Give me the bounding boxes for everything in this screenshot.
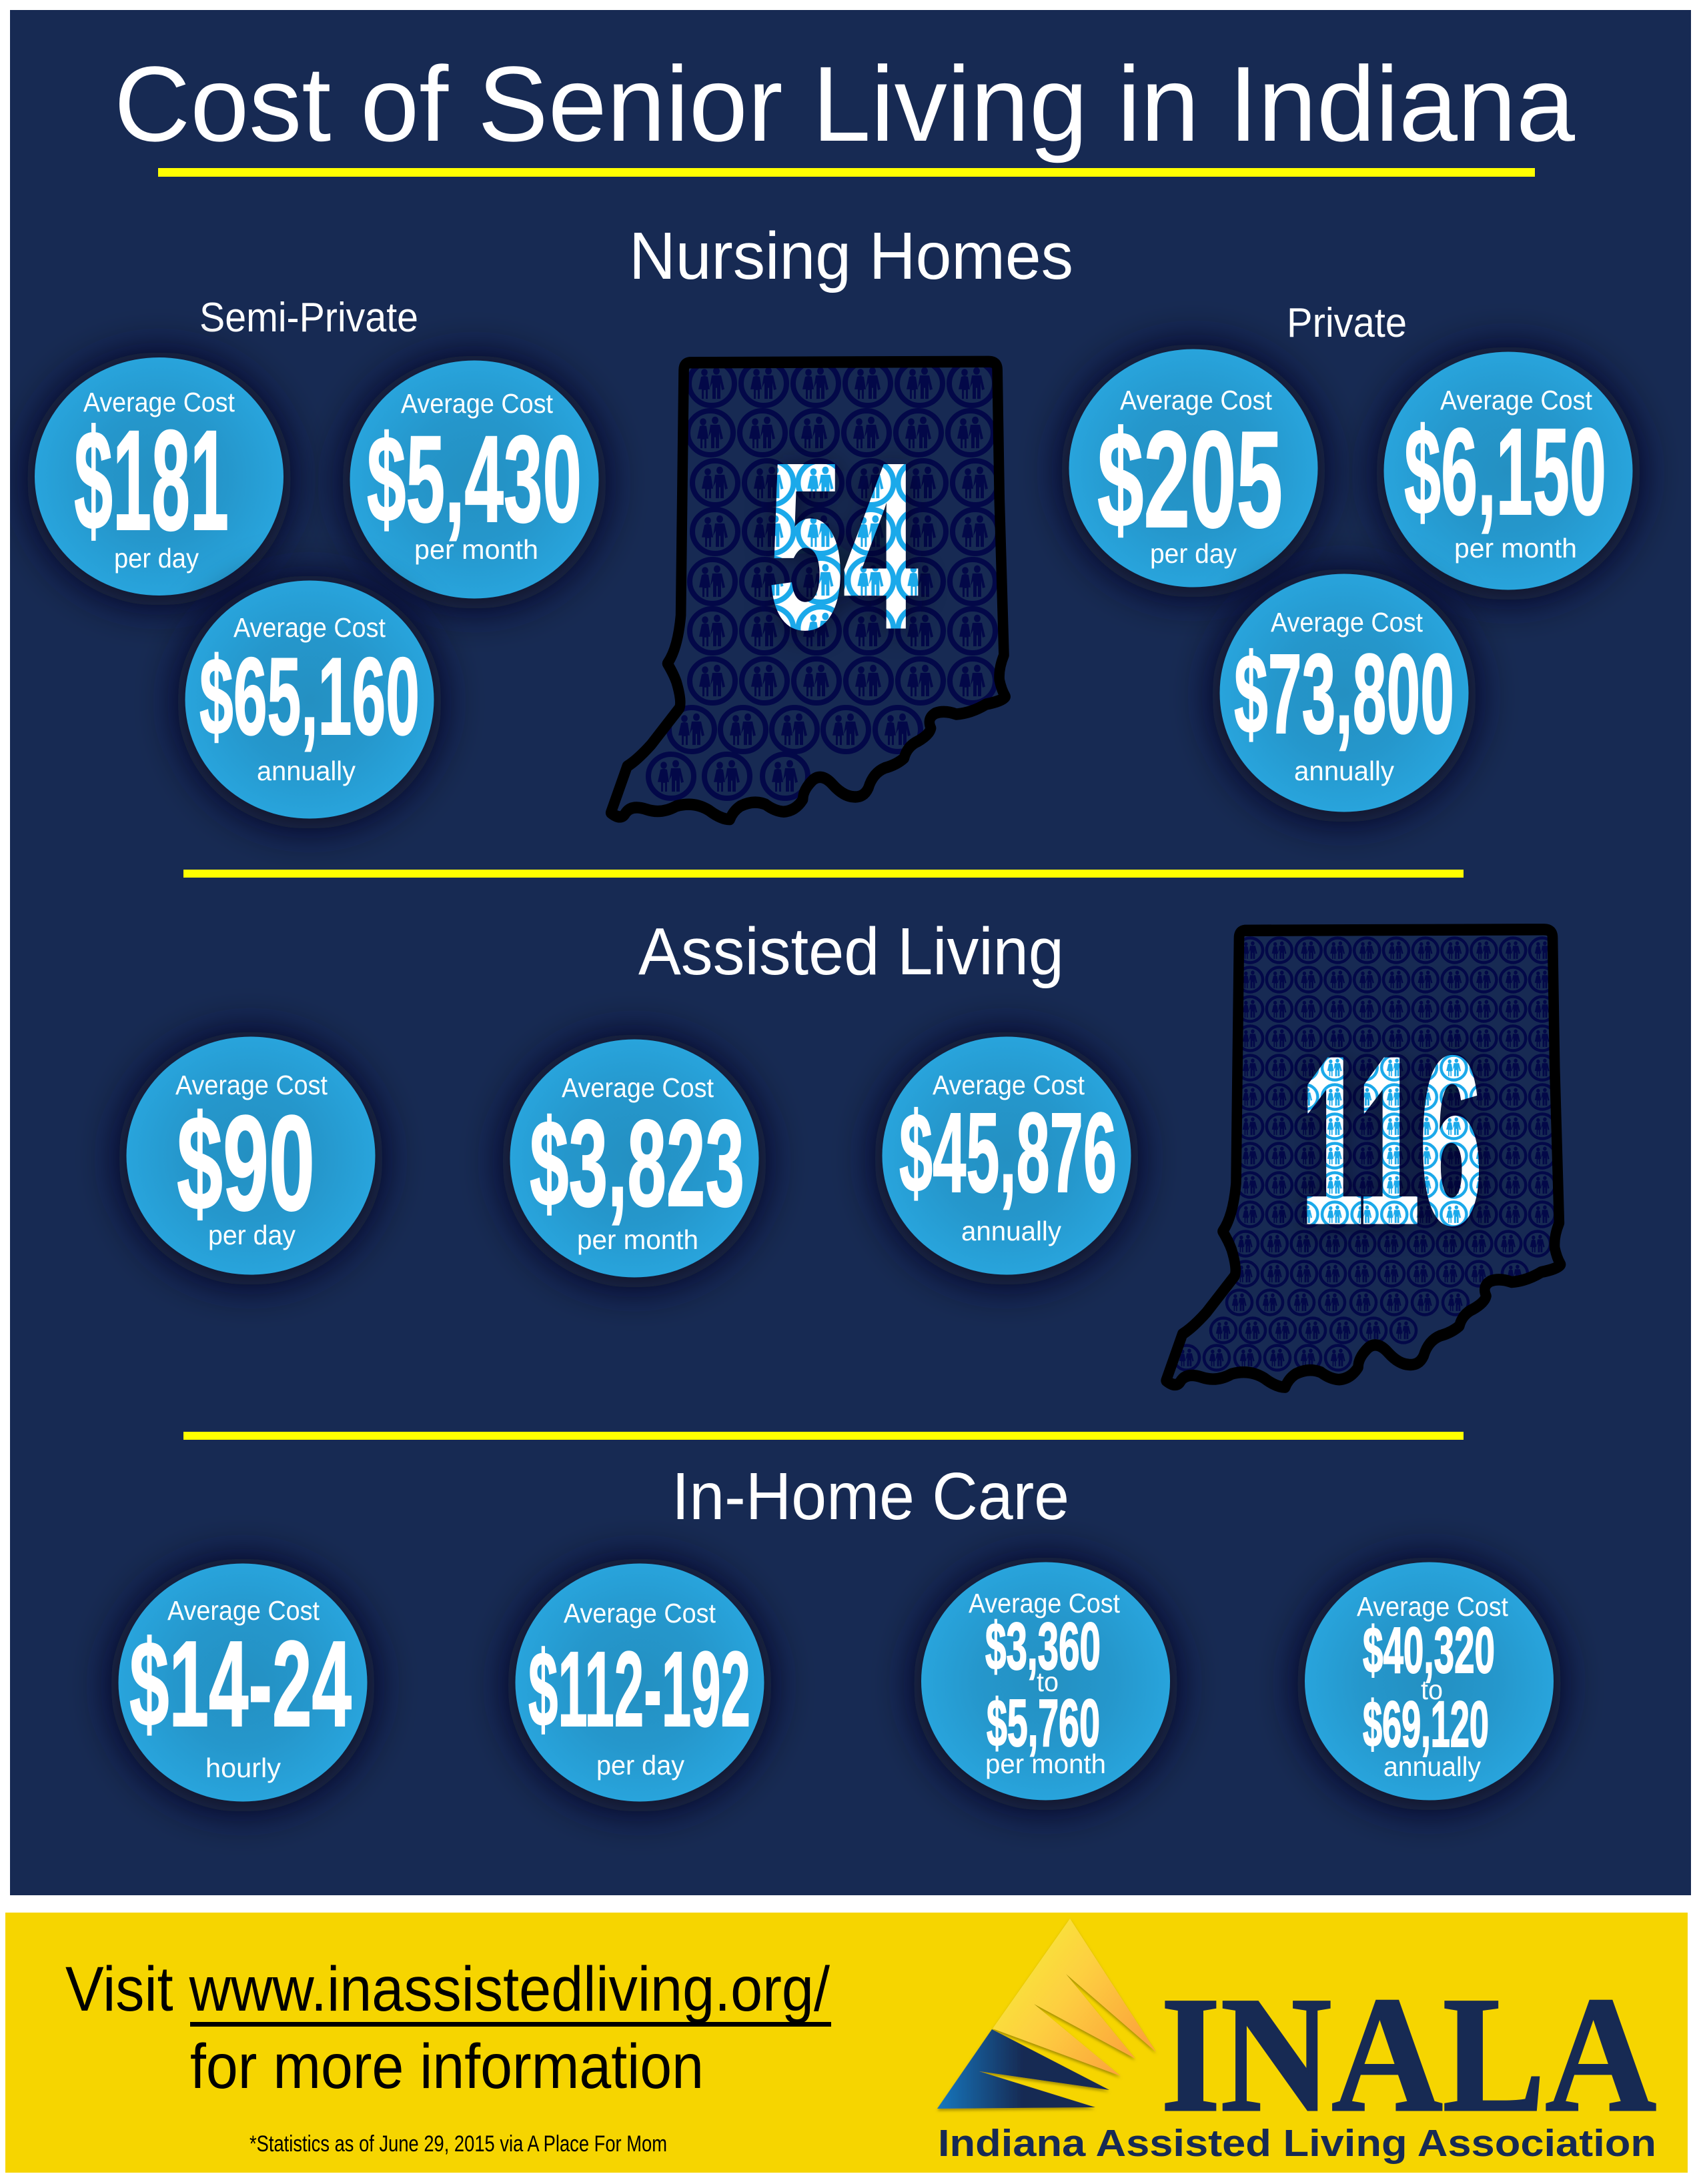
circle: $40,320 to $69,120 annually bbox=[1297, 1557, 1561, 1811]
link underline bbox=[190, 2022, 831, 2027]
circle: $112-192 per day: Average Cost bbox=[564, 1598, 716, 1628]
circle: $181 per day: per day bbox=[114, 543, 199, 574]
circle: $3,823 per month bbox=[502, 1034, 766, 1288]
subheading: Semi-Private: Semi-Private bbox=[199, 295, 418, 341]
circle: $90 per day: $90 bbox=[177, 1088, 315, 1239]
circle: $205 per day: per day bbox=[1150, 538, 1237, 569]
circle: $6,150 per month: Average Cost bbox=[1440, 385, 1593, 415]
circle: $90 per day: per day bbox=[208, 1220, 296, 1250]
state outline bbox=[1166, 930, 1561, 1387]
circle: $205 per day: $205 bbox=[1097, 403, 1283, 556]
number 54: 54 bbox=[768, 415, 919, 677]
circle: $6,150 per month bbox=[1376, 347, 1640, 600]
panel: yellow footer bbox=[5, 1913, 1688, 2173]
number shadow: 54 bbox=[768, 418, 919, 680]
circle: $14-24 hourly: Average Cost bbox=[167, 1595, 320, 1626]
circle: $3,360 to $5,760 per month: $5,760 bbox=[987, 1686, 1100, 1761]
circle: $45,876 annually: annually bbox=[961, 1216, 1061, 1246]
subheading: Private: Private bbox=[1287, 300, 1407, 346]
circle: $40,320 to $69,120 annually: Average Cost bbox=[1357, 1591, 1509, 1622]
circle: $181 per day: Average Cost bbox=[83, 387, 235, 417]
circle: $3,360 to $5,760 per month: $3,360 bbox=[985, 1609, 1101, 1684]
circle: $205 per day bbox=[1061, 344, 1325, 598]
circle: $73,800 annually: annually bbox=[1294, 756, 1394, 786]
circle: $181 per day: $181 bbox=[74, 401, 229, 560]
map: Indiana nursing homes 54 bbox=[611, 361, 1005, 820]
circle: $65,160 annually: $65,160 bbox=[199, 635, 420, 758]
circle: $14-24 hourly: hourly bbox=[205, 1753, 281, 1783]
circle: $45,876 annually: $45,876 bbox=[899, 1090, 1117, 1216]
people pattern bbox=[648, 361, 998, 798]
call to action line 2: for more information bbox=[190, 2031, 704, 2102]
map: Indiana assisted living 116: 116 bbox=[1301, 1011, 1482, 1276]
circle: $3,823 per month: per month bbox=[577, 1224, 698, 1255]
circle: $112-192 per day: $112-192 bbox=[528, 1629, 750, 1749]
circle: $73,800 annually: Average Cost bbox=[1271, 607, 1424, 638]
circle: $3,823 per month: $3,823 bbox=[530, 1095, 744, 1232]
people pattern bbox=[1174, 938, 1555, 1370]
circle: $5,430 per month bbox=[342, 355, 606, 609]
map: Indiana assisted living 116 bbox=[1166, 930, 1561, 1387]
circle: $112-192 per day bbox=[508, 1558, 772, 1812]
circle: $181 per day bbox=[27, 352, 291, 606]
call to action line 1: Visit www.inassistedliving.org/ bbox=[65, 1954, 830, 2025]
circle: $6,150 per month: per month bbox=[1454, 533, 1577, 564]
circle: $112-192 per day: per day bbox=[596, 1750, 684, 1781]
state outline bbox=[611, 361, 1005, 820]
circle: $90 per day bbox=[119, 1032, 383, 1285]
logo: association name: Indiana Assisted Living Association bbox=[938, 2122, 1656, 2165]
circle: $40,320 to $69,120 annually: to bbox=[1421, 1675, 1443, 1705]
circle: $14-24 hourly bbox=[111, 1558, 375, 1812]
circle: $73,800 annually: $73,800 bbox=[1234, 631, 1454, 758]
circle: $3,360 to $5,760 per month: Average Cost bbox=[969, 1588, 1121, 1618]
circle: $5,430 per month: $5,430 bbox=[367, 411, 582, 548]
circle: $45,876 annually: Average Cost bbox=[933, 1070, 1085, 1100]
circle: $205 per day: Average Cost bbox=[1120, 385, 1273, 415]
circle: $3,360 to $5,760 per month bbox=[914, 1557, 1178, 1811]
circle: $5,430 per month: Average Cost bbox=[401, 388, 554, 419]
circle: $3,823 per month: Average Cost bbox=[562, 1072, 714, 1103]
circle: $3,360 to $5,760 per month: per month bbox=[985, 1749, 1106, 1779]
circle: $90 per day: Average Cost bbox=[175, 1070, 328, 1100]
title underline bbox=[158, 168, 1535, 177]
logo: INALA triangle bbox=[937, 1919, 1156, 2109]
circle: $3,360 to $5,760 per month: to bbox=[1037, 1667, 1059, 1697]
heading: Assisted Living: Assisted Living bbox=[638, 914, 1064, 989]
divider bbox=[183, 1432, 1464, 1440]
statistics source note: *Statistics as of June 29, 2015 via A Place For Mom bbox=[249, 2131, 667, 2157]
circle: $5,430 per month: per month bbox=[414, 534, 538, 565]
heading: In-Home Care: In-Home Care bbox=[672, 1459, 1069, 1534]
circle: $65,160 annually bbox=[177, 576, 442, 829]
logo: INALA wordmark: INALA bbox=[1161, 1963, 1656, 2146]
circle: $65,160 annually: annually bbox=[257, 756, 356, 786]
circle: $73,800 annually bbox=[1212, 569, 1476, 822]
circle: $40,320 to $69,120 annually: annually bbox=[1383, 1751, 1481, 1782]
circle: $65,160 annually: Average Cost bbox=[233, 612, 386, 643]
circle: $45,876 annually bbox=[875, 1032, 1139, 1285]
divider bbox=[183, 870, 1464, 878]
circle: $40,320 to $69,120 annually: $69,120 bbox=[1363, 1688, 1489, 1761]
title: Cost of Senior Living in Indiana bbox=[114, 44, 1575, 163]
circle: $14-24 hourly: $14-24 bbox=[129, 1615, 352, 1752]
heading: Nursing Homes: Nursing Homes bbox=[629, 219, 1073, 293]
map: Indiana assisted living 116: 116 bbox=[1301, 1008, 1482, 1273]
circle: $40,320 to $69,120 annually: $40,320 bbox=[1363, 1614, 1495, 1687]
